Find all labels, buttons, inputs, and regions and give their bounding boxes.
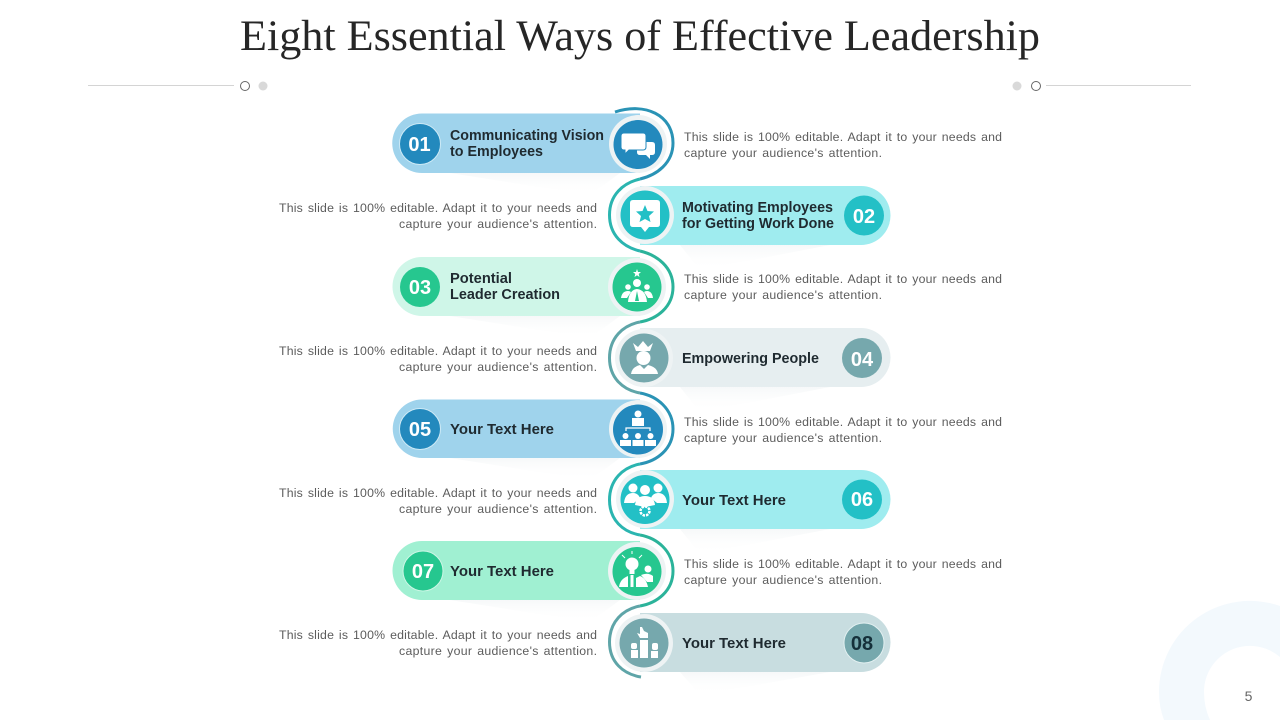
header divider: left <box>88 82 268 90</box>
item 07 <box>392 541 640 600</box>
pill 07 <box>392 541 640 600</box>
number 03 <box>400 267 440 307</box>
number 08: 08 <box>851 633 873 655</box>
label 08: Your Text Here <box>682 636 786 652</box>
description 08 <box>279 628 597 658</box>
description 05 <box>684 415 1002 445</box>
number 05 <box>400 408 440 450</box>
pill 04 <box>640 328 890 387</box>
description 04: This slide is 100% editable. Adapt it to your needs and <box>279 344 597 358</box>
item 08 <box>640 613 890 672</box>
description 08: capture your audience's attention. <box>399 644 597 658</box>
serpentine connector <box>610 109 673 677</box>
description 01: This slide is 100% editable. Adapt it to your needs and <box>684 130 1002 144</box>
pill 03 <box>392 257 640 316</box>
label 01: Communicating Vision <box>450 128 604 144</box>
description 01 <box>684 130 1002 160</box>
description 01: capture your audience's attention. <box>684 146 882 160</box>
description 08: This slide is 100% editable. Adapt it to your needs and <box>279 628 597 642</box>
description 03 <box>684 272 1002 302</box>
pill 06 <box>640 470 890 529</box>
number 02: 02 <box>853 206 875 228</box>
page number: 5 <box>1245 688 1253 704</box>
label 03 <box>450 271 560 303</box>
label 01 <box>450 128 604 160</box>
label 04: Empowering People <box>682 351 819 367</box>
icon: crowned person <box>620 334 668 382</box>
number 07: 07 <box>412 561 434 583</box>
item 04 <box>640 328 890 387</box>
label 01: to Employees <box>450 144 543 160</box>
number 06 <box>842 480 882 520</box>
label 03: Leader Creation <box>450 287 560 303</box>
item 03 <box>392 257 640 316</box>
header divider: right <box>1012 82 1191 90</box>
icon: star message <box>620 190 670 240</box>
icon: leader group <box>612 262 662 312</box>
number 08 <box>844 623 884 663</box>
item 02 <box>640 186 890 245</box>
background ring decoration <box>1159 601 1280 720</box>
icon: speech bubbles <box>614 120 662 169</box>
description 07 <box>684 557 1002 587</box>
label 02 <box>682 200 834 232</box>
number 01 <box>400 124 440 164</box>
number 03: 03 <box>409 277 431 299</box>
description 04: capture your audience's attention. <box>399 360 597 374</box>
icon rings <box>608 115 674 672</box>
description 07: This slide is 100% editable. Adapt it to your needs and <box>684 557 1002 571</box>
label 05: Your Text Here <box>450 422 554 438</box>
number 04 <box>842 338 882 378</box>
pill 02 <box>640 186 890 245</box>
number 04: 04 <box>851 349 874 371</box>
icon: hierarchy <box>613 404 663 454</box>
description 04 <box>279 344 597 374</box>
description 05: This slide is 100% editable. Adapt it to your needs and <box>684 415 1002 429</box>
description 06 <box>279 486 597 516</box>
label 06: Your Text Here <box>682 493 786 509</box>
icon: idea presenter <box>612 547 662 596</box>
description 07: capture your audience's attention. <box>684 573 882 587</box>
pill 08 <box>640 613 890 672</box>
description 06: This slide is 100% editable. Adapt it to your needs and <box>279 486 597 500</box>
item 05 <box>393 400 640 458</box>
description 03: This slide is 100% editable. Adapt it to your needs and <box>684 272 1002 286</box>
icon: team and gear <box>620 475 670 524</box>
label 02: Motivating Employees <box>682 200 833 216</box>
description 02: This slide is 100% editable. Adapt it to your needs and <box>279 201 597 215</box>
number 06: 06 <box>851 489 873 511</box>
label 07: Your Text Here <box>450 564 554 580</box>
description 02: capture your audience's attention. <box>399 217 597 231</box>
number 02 <box>844 196 884 236</box>
number 01: 01 <box>408 134 431 156</box>
title: Eight Essential Ways of Effective Leadership <box>240 13 1040 60</box>
description 05: capture your audience's attention. <box>684 431 882 445</box>
number 07 <box>403 551 443 591</box>
label 03: Potential <box>450 271 512 287</box>
item 06 <box>640 470 890 529</box>
description 02 <box>279 201 597 231</box>
pill shadows <box>450 173 830 695</box>
description 03: capture your audience's attention. <box>684 288 882 302</box>
pill 05 <box>393 400 640 458</box>
icon: podium pointer <box>620 618 668 668</box>
item 01 <box>392 114 640 173</box>
pill 01 <box>392 114 640 173</box>
number 05: 05 <box>409 419 431 441</box>
label 02: for Getting Work Done <box>682 216 834 232</box>
description 06: capture your audience's attention. <box>399 502 597 516</box>
